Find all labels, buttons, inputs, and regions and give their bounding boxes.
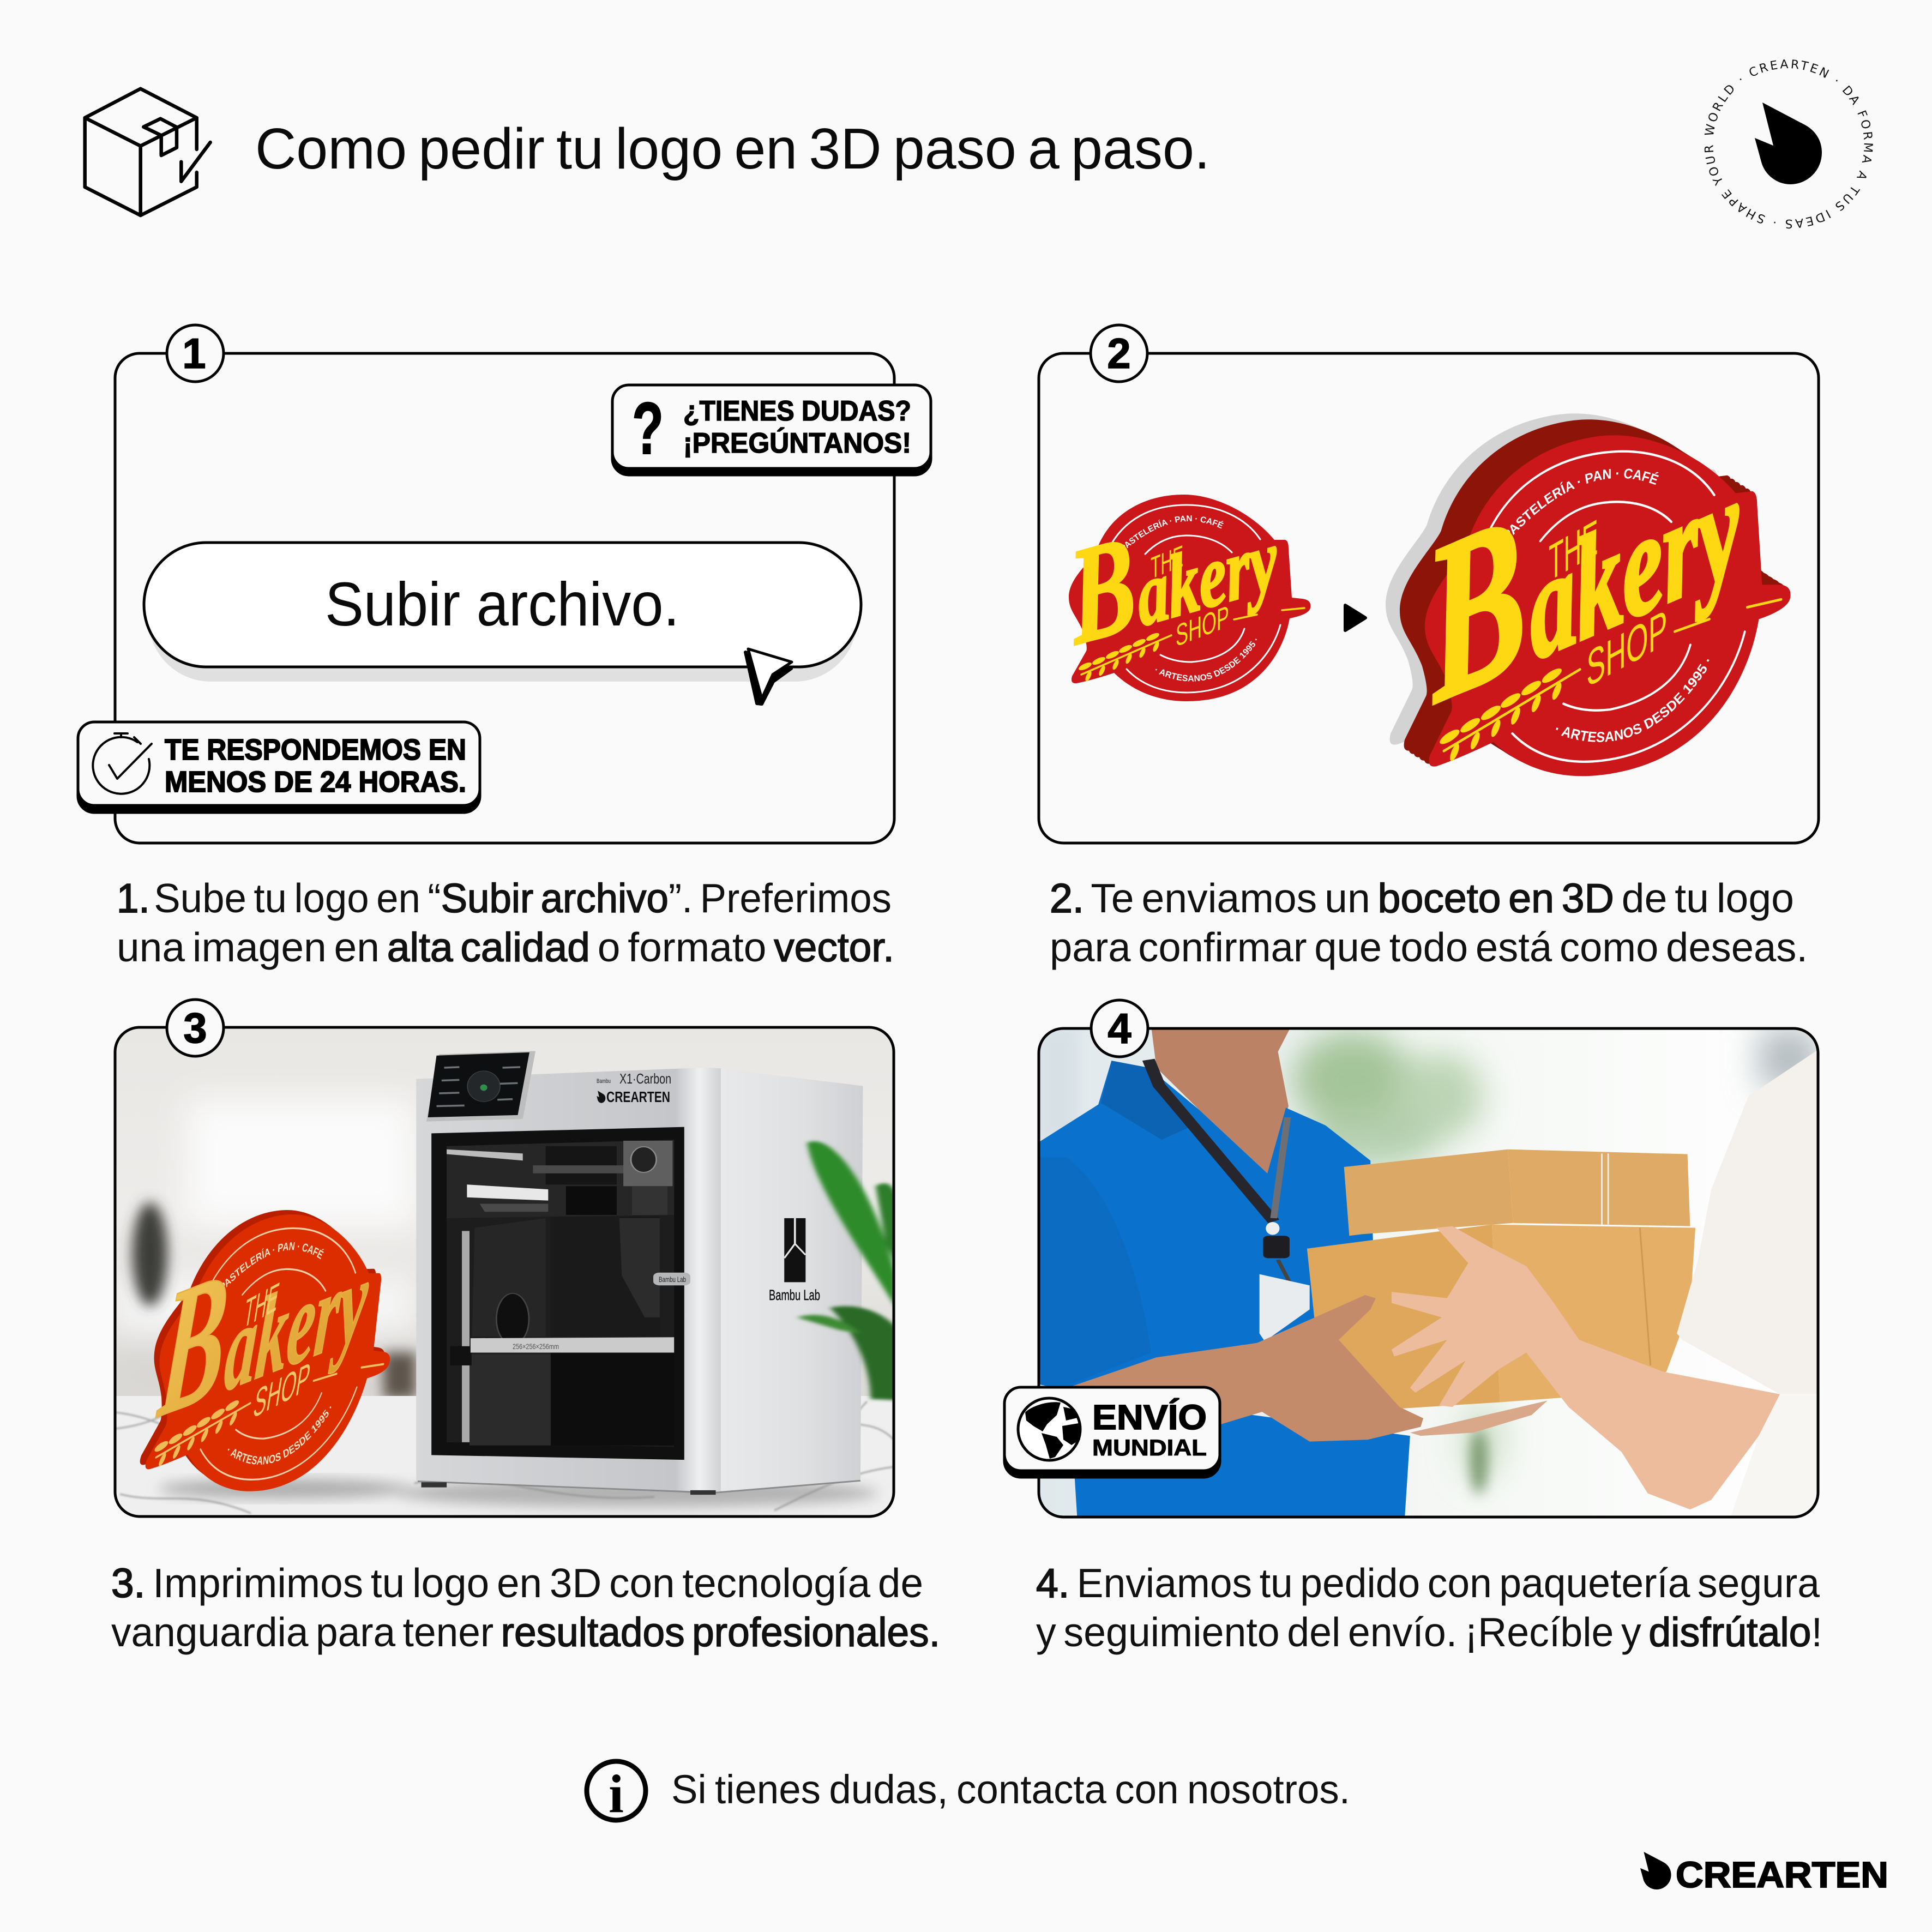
printed bakery logo on the table: · ARTESANOS DESDE 1995 · [228, 1406, 332, 1465]
printed bakery logo on the table: SHOP [251, 1353, 313, 1428]
icon: stopwatch with check [93, 733, 152, 794]
brand seal: circular text and flame: · CREARTEN · DA FORMA A TUS IDEAS · SHAPE YOUR WORLD [1705, 59, 1873, 229]
text block: step 4: y seguimiento del envío. ¡Recíble y disfrútalo! [1036, 1609, 1822, 1655]
3D printer: CREARTEN [606, 1088, 670, 1105]
text block: step 2: para confirmar que todo está como deseas. [1050, 924, 1808, 970]
text block: step 4: 4. Enviamos tu pedido con paquetería segura [1036, 1560, 1820, 1606]
badge: questions: ¿TIENES DUDAS? [683, 395, 911, 427]
blurred background [1039, 1028, 1819, 1517]
3D printer: Bambu Lab [769, 1287, 820, 1303]
title: Como pedir tu logo en 3D paso a paso. [255, 117, 1210, 181]
cardboard boxes [1307, 1149, 1695, 1409]
badge: worldwide shipping: MUNDIAL [1092, 1435, 1207, 1460]
flat bakery logo: PASTELERÍA · PAN · CAFÉ [1123, 515, 1224, 549]
panel 1: upload file [78, 325, 931, 843]
badge: questions: ¡PREGÚNTANOS! [683, 428, 911, 459]
printed bakery logo on the table [140, 1210, 409, 1504]
3D printer: X1·Carbon [619, 1070, 671, 1087]
text block: step 3: vanguardia para tener resultados profesionales. [111, 1609, 940, 1655]
arrow between logos [1345, 605, 1365, 630]
flat bakery logo [1062, 466, 1310, 701]
text block: step 1: 1. Sube tu logo en “Subir archivo”. Preferimos [117, 875, 892, 921]
flat bakery logo: Bakery [1062, 466, 1283, 675]
text block: step 1 [117, 875, 894, 970]
upload button [144, 543, 861, 682]
flat bakery logo: SHOP [1176, 599, 1229, 654]
step number 2 [1091, 325, 1147, 382]
step number 3 [167, 1000, 224, 1056]
extruded 3D bakery logo: · ARTESANOS DESDE 1995 · [1556, 659, 1709, 742]
panel 4: delivery photo illustration [1004, 1000, 1822, 1519]
brand wordmark with flame: CREARTEN [1676, 1855, 1888, 1895]
printed bakery logo on the table: THE [241, 1273, 282, 1338]
contact note: Si tienes dudas, contacta con nosotros. [671, 1767, 1350, 1812]
step number 4 [1091, 1000, 1148, 1057]
plant leaves in the foreground [797, 1141, 906, 1401]
icon: globe [1018, 1398, 1080, 1460]
3D printer [416, 1051, 863, 1495]
extruded 3D bakery logo: THE [1549, 508, 1598, 592]
flat bakery logo: THE [1151, 539, 1183, 586]
badge: questions [612, 385, 931, 475]
panel 2: 3D sketch [1039, 325, 1819, 843]
icon: cursor arrow [745, 649, 792, 704]
panel 1 frame [115, 353, 894, 843]
3D printer: Bambu [597, 1078, 611, 1085]
icon: information [587, 1761, 646, 1824]
marble table [115, 1396, 894, 1519]
step number 4: 4 [1108, 1004, 1131, 1052]
hands and arms [1072, 1226, 1780, 1509]
upload button: Subir archivo. [325, 570, 679, 639]
badge: response time: TE RESPONDEMOS EN [165, 733, 466, 766]
extruded 3D bakery logo: Bakery [1414, 373, 1748, 752]
text block: step 3: 3. Imprimimos tu logo en 3D con tecnología de [111, 1560, 923, 1606]
text block: step 1: una imagen en alta calidad o formato vector. [117, 924, 894, 970]
text block: step 2: 2. Te enviamos un boceto en 3D de tu logo [1050, 875, 1794, 921]
blurred room background [115, 1027, 894, 1399]
3D printer: 256×256×256mm [513, 1342, 559, 1351]
delivery person [1040, 1026, 1410, 1518]
extruded 3D bakery logo: PASTELERÍA · PAN · CAFÉ [1507, 469, 1659, 535]
badge: questions: ? [632, 387, 664, 470]
text block: step 4 [1036, 1560, 1822, 1655]
panel 2 frame [1039, 353, 1819, 843]
badge: response time: MENOS DE 24 HORAS. [165, 766, 466, 798]
panel 4 frame [1039, 1028, 1818, 1517]
flat bakery logo: · ARTESANOS DESDE 1995 · [1155, 639, 1257, 682]
text block: step 3 [111, 1560, 940, 1655]
3D printer: Bambu Lab [659, 1275, 686, 1284]
printed bakery logo on the table: Bakery [152, 1174, 378, 1458]
step number 1 [167, 325, 224, 382]
icon: parcel box with check [85, 89, 210, 215]
panel 3 frame [115, 1027, 894, 1516]
step number 1: 1 [182, 329, 206, 377]
badge: response time [78, 722, 480, 812]
badge: worldwide shipping: ENVÍO [1092, 1398, 1207, 1437]
step number 3: 3 [183, 1004, 207, 1052]
step number 2: 2 [1107, 329, 1131, 377]
printed bakery logo on the table: PASTELERÍA · PAN · CAFÉ [222, 1242, 324, 1287]
panel 3: printing photo illustration [113, 998, 895, 1518]
text block: step 2 [1050, 875, 1808, 970]
extruded 3D bakery logo: SHOP [1586, 598, 1668, 698]
icon: information: i [609, 1764, 624, 1824]
extruded 3D bakery logo [1386, 365, 1790, 798]
badge: worldwide shipping [1004, 1387, 1220, 1477]
customer white shirt [1677, 1047, 1822, 1519]
